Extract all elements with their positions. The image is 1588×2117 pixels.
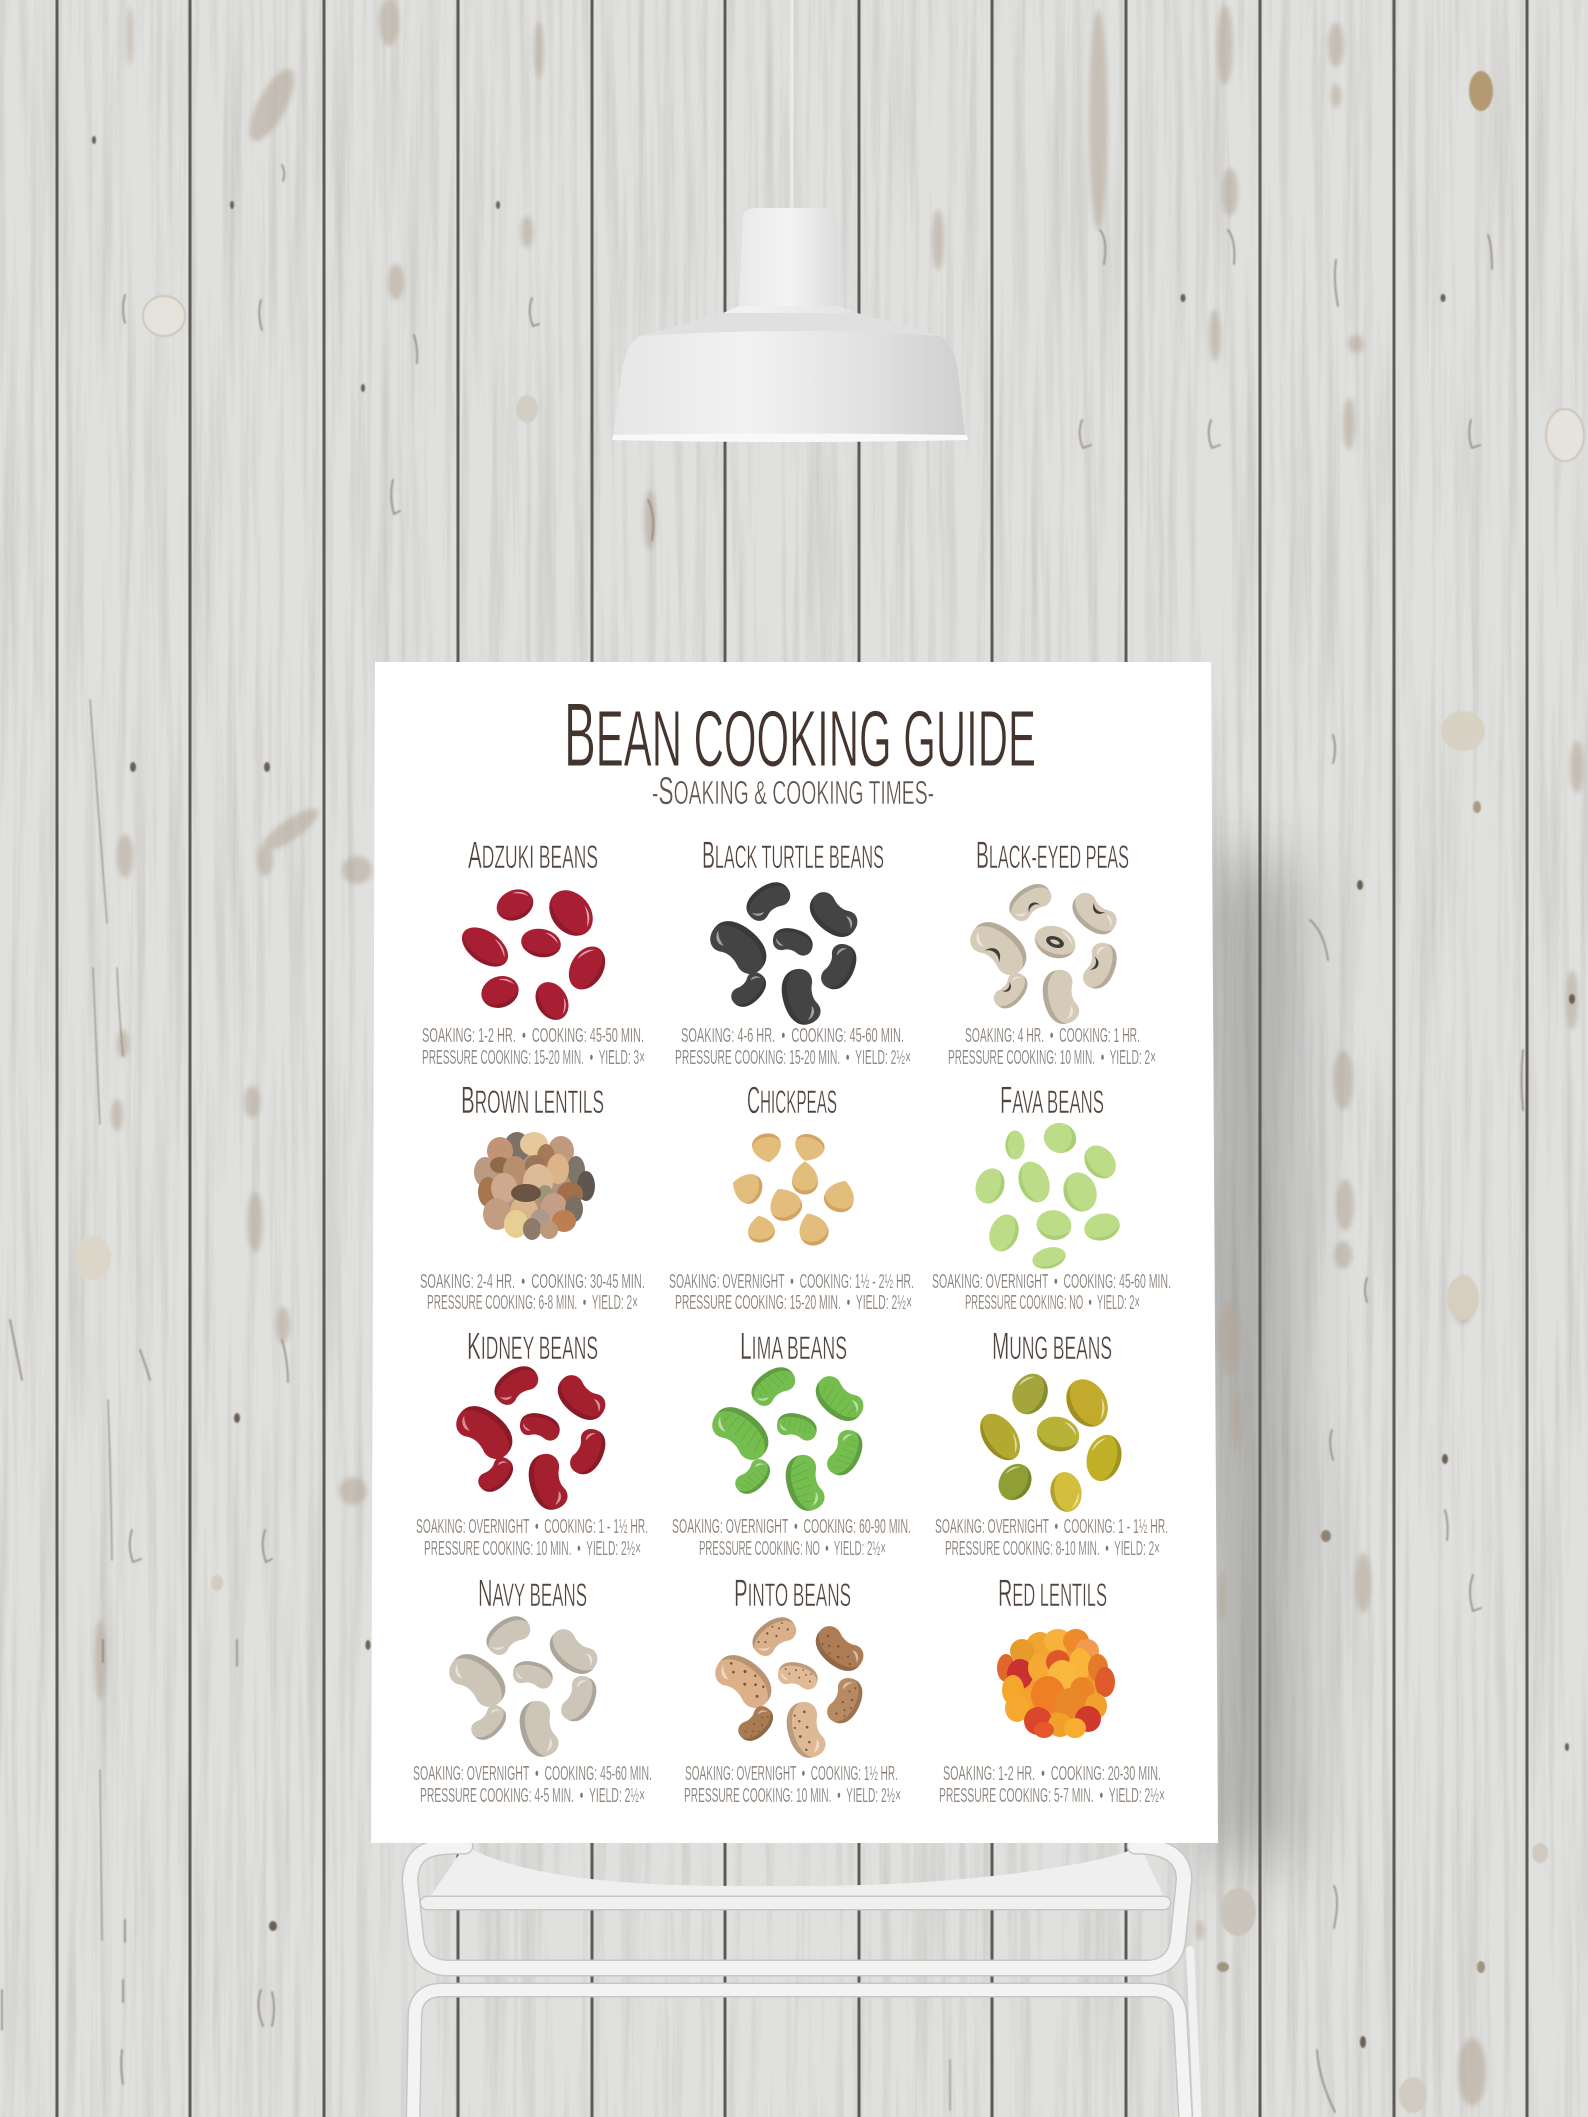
icon: black-eyed peas — [964, 877, 1122, 1027]
soft shadow cast by poster on wall — [1205, 860, 1295, 1860]
icon: kidney beans — [450, 1359, 612, 1514]
details — [422, 1025, 645, 1069]
icon: black turtle beans — [704, 875, 863, 1029]
details: SOAKING: OVERNIGHT • COOKING: 1 - 1½ HR. — [416, 1516, 648, 1538]
white table frame — [410, 1846, 1198, 2117]
details: PRESSURE COOKING: 15-20 MIN. • YIELD: 2½× — [675, 1292, 912, 1314]
details: PRESSURE COOKING: 5-7 MIN. • YIELD: 2½× — [939, 1785, 1165, 1807]
table rails — [410, 1846, 1198, 2117]
details: PRESSURE COOKING: NO • YIELD: 2½× — [699, 1538, 886, 1560]
panel: Mung beans — [935, 1326, 1168, 1560]
lamp neck — [739, 208, 839, 308]
details: PRESSURE COOKING: 10 MIN. • YIELD: 2½× — [424, 1538, 641, 1560]
lamp cord — [790, 0, 794, 209]
details — [939, 1763, 1165, 1807]
name: ADZUKI BEANS — [468, 835, 598, 877]
details: SOAKING: 2-4 HR. • COOKING: 30-45 MIN. — [420, 1271, 645, 1293]
lamp rim — [612, 434, 968, 442]
panel: Fava beans — [932, 1080, 1171, 1314]
icon: chickpeas — [728, 1130, 860, 1249]
panel: Black turtle beans — [675, 835, 911, 1069]
panel: Adzuki beans — [422, 835, 645, 1069]
name: NAVY BEANS — [478, 1573, 587, 1615]
details — [672, 1516, 911, 1560]
icon: adzuki beans — [455, 881, 613, 1026]
pendant lamp — [612, 0, 968, 442]
name: LIMA BEANS — [740, 1326, 847, 1368]
icon: fava beans — [971, 1118, 1123, 1272]
panel: Kidney beans — [416, 1326, 648, 1560]
panel: Chickpeas — [669, 1080, 914, 1314]
table top surface — [430, 1846, 1164, 1897]
details: PRESSURE COOKING: 15-20 MIN. • YIELD: 2½× — [675, 1047, 911, 1069]
name: KIDNEY BEANS — [467, 1326, 598, 1368]
icon: lima beans — [706, 1360, 869, 1515]
details: SOAKING: 4 HR. • COOKING: 1 HR. — [965, 1025, 1140, 1047]
details: SOAKING: 4-6 HR. • COOKING: 45-60 MIN. — [681, 1025, 904, 1047]
details: PRESSURE COOKING: 15-20 MIN. • YIELD: 3× — [422, 1047, 645, 1069]
icon: brown lentils — [474, 1132, 595, 1240]
panel: Lima beans — [672, 1326, 911, 1560]
details — [416, 1516, 648, 1560]
details — [935, 1516, 1168, 1560]
details — [675, 1025, 911, 1069]
panel: Red lentils — [939, 1573, 1165, 1807]
details — [684, 1763, 901, 1807]
details: SOAKING: 1-2 HR. • COOKING: 45-50 MIN. — [422, 1025, 644, 1047]
panel: Black-eyed peas — [948, 835, 1156, 1069]
details: SOAKING: OVERNIGHT • COOKING: 1 - 1½ HR. — [935, 1516, 1168, 1538]
subtitle: -SOAKING & COOKING TIMES- — [652, 770, 934, 813]
icon: pinto beans — [709, 1610, 869, 1762]
details — [420, 1271, 645, 1314]
panel: Navy beans — [413, 1573, 652, 1807]
details: SOAKING: OVERNIGHT • COOKING: 1½ HR. — [685, 1763, 898, 1785]
lamp dome — [613, 306, 965, 437]
name: BROWN LENTILS — [461, 1080, 604, 1122]
name: FAVA BEANS — [1000, 1080, 1104, 1122]
name: MUNG BEANS — [992, 1326, 1112, 1368]
details: PRESSURE COOKING: 8-10 MIN. • YIELD: 2× — [945, 1538, 1160, 1560]
title: BEAN COOKING GUIDE — [564, 685, 1036, 786]
details: SOAKING: OVERNIGHT • COOKING: 45-60 MIN. — [932, 1271, 1171, 1293]
panel: Pinto beans — [684, 1573, 901, 1807]
details — [948, 1025, 1156, 1069]
icon: mung beans — [972, 1368, 1127, 1514]
details: PRESSURE COOKING: 10 MIN. • YIELD: 2½× — [684, 1785, 901, 1807]
icon: red lentils — [997, 1629, 1115, 1738]
name: BLACK-EYED PEAS — [976, 835, 1129, 877]
details: SOAKING: OVERNIGHT • COOKING: 1½ - 2½ HR. — [669, 1271, 914, 1293]
icon: navy beans — [443, 1609, 603, 1761]
details: PRESSURE COOKING: 4-5 MIN. • YIELD: 2½× — [420, 1785, 645, 1807]
details — [413, 1763, 652, 1807]
details: PRESSURE COOKING: 10 MIN. • YIELD: 2× — [948, 1047, 1156, 1069]
details — [932, 1271, 1171, 1314]
panel: Brown lentils — [420, 1080, 645, 1314]
name: RED LENTILS — [998, 1573, 1107, 1615]
name: BLACK TURTLE BEANS — [702, 835, 884, 877]
details: PRESSURE COOKING: 6-8 MIN. • YIELD: 2× — [427, 1292, 638, 1314]
name: CHICKPEAS — [747, 1080, 837, 1122]
details: SOAKING: OVERNIGHT • COOKING: 45-60 MIN. — [413, 1763, 652, 1785]
name: PINTO BEANS — [734, 1573, 851, 1615]
details: SOAKING: 1-2 HR. • COOKING: 20-30 MIN. — [943, 1763, 1161, 1785]
details: SOAKING: OVERNIGHT • COOKING: 60-90 MIN. — [672, 1516, 911, 1538]
details — [669, 1271, 914, 1314]
details: PRESSURE COOKING: NO • YIELD: 2× — [965, 1292, 1140, 1314]
poster panel — [371, 662, 1218, 1843]
